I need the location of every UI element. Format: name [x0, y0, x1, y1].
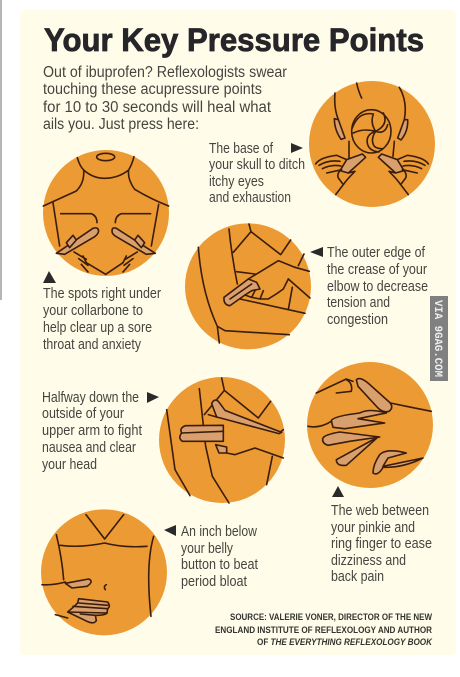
- intro text: for 10 to 30 seconds will heal what: [43, 99, 272, 116]
- caption: belly: period bloat: [181, 574, 247, 590]
- caption: skull: [209, 141, 305, 206]
- caption: hand web: ring finger to ease: [331, 536, 432, 552]
- caption: upper arm: upper arm to fight: [42, 423, 142, 439]
- icon: belly: [41, 509, 167, 635]
- caption: hand web: your pinkie and: [331, 520, 415, 536]
- caption: elbow: tension and: [327, 295, 390, 311]
- caption: elbow: elbow to decrease: [327, 279, 428, 295]
- icon: upper arm: [159, 377, 285, 503]
- caption: skull: your skull to ditch: [209, 157, 305, 173]
- source credit: OF THE EVERYTHING REFLEXOLOGY BOOK: [257, 637, 433, 647]
- caption: upper arm: your head: [42, 457, 97, 473]
- source credit: ENGLAND INSTITUTE OF REFLEXOLOGY AND AUTHOR: [215, 625, 432, 635]
- caption: collarbone: [43, 286, 161, 353]
- caption: hand web: back pain: [331, 569, 384, 585]
- watermark: via 9gag: VIA 9GAG.COM: [431, 300, 443, 377]
- caption: elbow: congestion: [327, 312, 388, 328]
- intro text: ails you. Just press here:: [43, 116, 199, 133]
- intro text: [43, 64, 287, 133]
- caption: hand web: dizziness and: [331, 553, 406, 569]
- caption: collarbone: help clear up a sore: [43, 320, 152, 336]
- caption: skull: and exhaustion: [209, 190, 291, 206]
- arrow: collarbone: [43, 271, 56, 283]
- icon: elbow: [185, 223, 311, 349]
- title: Your Key Pressure Points: [44, 22, 424, 58]
- arrow: elbow: [310, 247, 323, 257]
- icon: hand web: [307, 362, 433, 488]
- caption: elbow: the crease of your: [327, 262, 427, 278]
- caption: hand web: [331, 503, 432, 585]
- caption: belly: An inch below: [181, 524, 257, 540]
- caption: skull: The base of: [209, 141, 274, 157]
- arrow: skull: [291, 143, 303, 153]
- caption: belly: [181, 524, 258, 590]
- caption: upper arm: outside of your: [42, 406, 124, 422]
- caption: upper arm: Halfway down the: [42, 390, 139, 406]
- source credit: [215, 612, 433, 647]
- arrow: belly: [164, 525, 176, 536]
- caption: belly: button to beat: [181, 557, 258, 573]
- caption: belly: your belly: [181, 541, 234, 557]
- icon: head and skull base: [309, 81, 435, 207]
- watermark: via 9gag: [430, 296, 448, 381]
- caption: collarbone: your collarbone to: [43, 303, 143, 319]
- caption: elbow: The outer edge of: [327, 245, 426, 261]
- arrow: upper arm: [147, 392, 159, 403]
- intro text: touching these acupressure points: [43, 81, 262, 98]
- caption: upper arm: [42, 390, 142, 473]
- source credit: SOURCE: VALERIE VONER, DIRECTOR OF THE NEW: [230, 612, 432, 622]
- caption: elbow: [327, 245, 428, 328]
- caption: skull: itchy eyes: [209, 174, 264, 190]
- caption: collarbone: The spots right under: [43, 286, 161, 302]
- icon: collarbone: [43, 150, 169, 276]
- caption: upper arm: nausea and clear: [42, 440, 136, 456]
- caption: collarbone: throat and anxiety: [43, 337, 142, 353]
- intro text: Out of ibuprofen? Reflexologists swear: [43, 64, 287, 81]
- arrow: hand web: [332, 486, 344, 497]
- caption: hand web: The web between: [331, 503, 429, 519]
